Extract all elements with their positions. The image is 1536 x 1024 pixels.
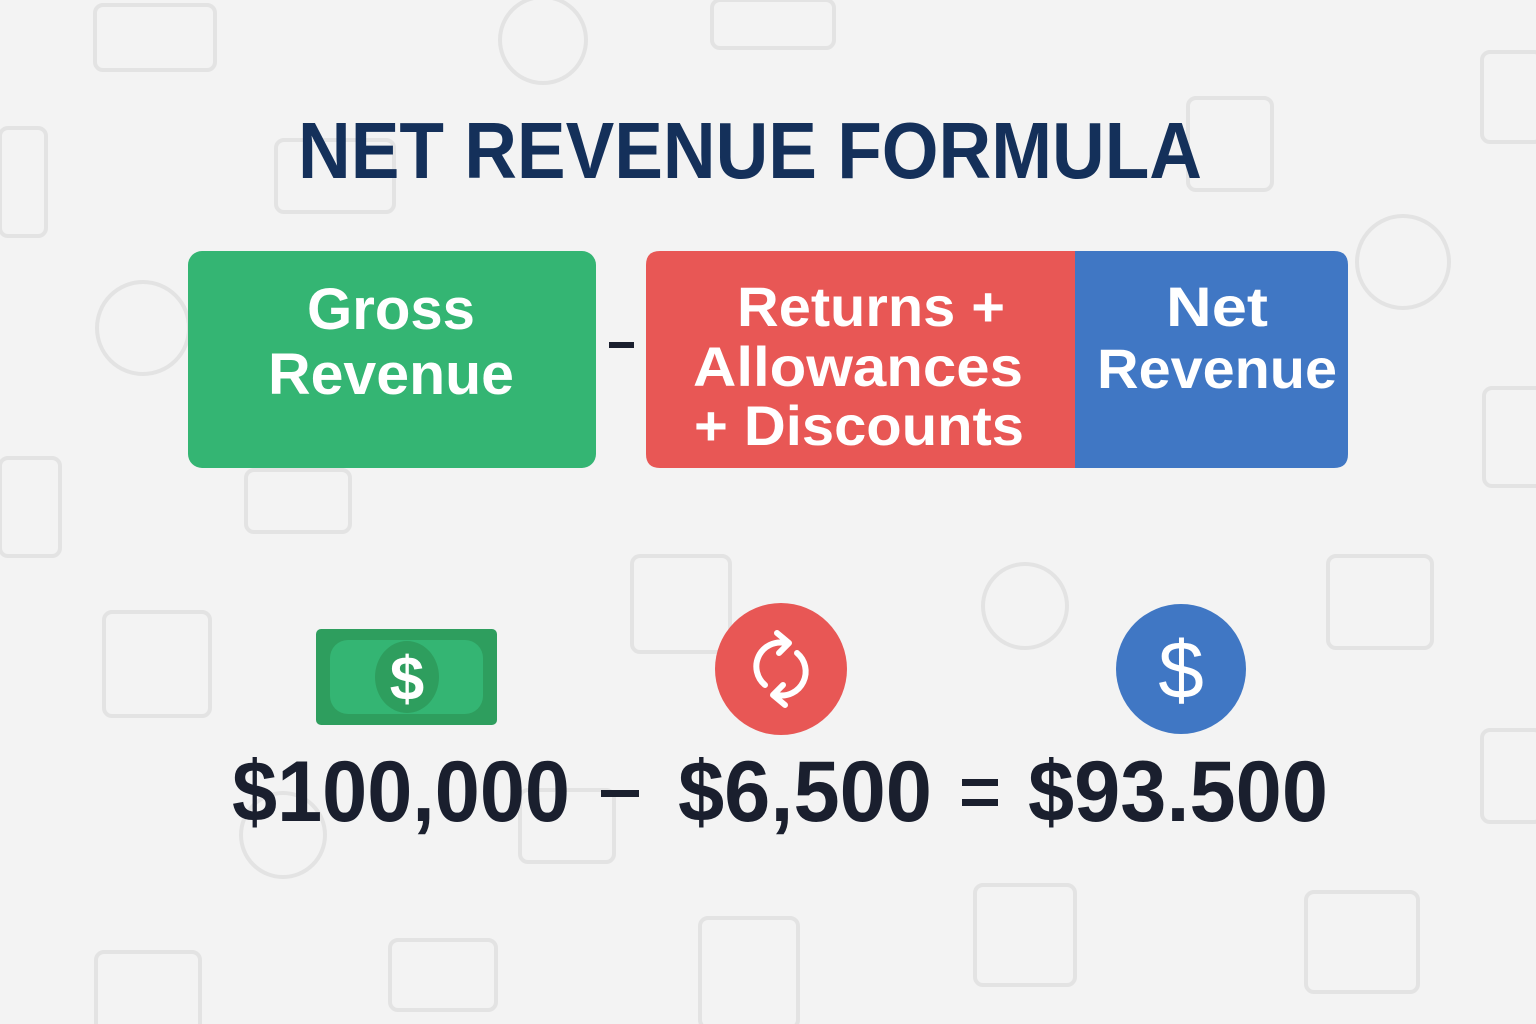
example calculation: $93.500 [1028, 744, 1328, 840]
example calculation: $6,500 [678, 744, 932, 840]
box: net revenue: Net [1166, 275, 1268, 338]
box: deductions: Returns + [737, 275, 1005, 338]
icon: dollar coin: $ [1158, 625, 1204, 716]
icon: dollar coin [1116, 604, 1246, 734]
box: deductions: + Discounts [694, 394, 1024, 457]
icon: banknote [316, 629, 497, 725]
box: net revenue [1075, 251, 1348, 468]
box: net revenue: Revenue [1097, 337, 1337, 400]
box: gross revenue [188, 251, 596, 468]
box: deductions: Allowances [693, 335, 1023, 398]
box: gross revenue: Revenue [268, 342, 514, 407]
example calculation: $100,000 [232, 744, 570, 840]
box: gross revenue: Gross [307, 277, 475, 342]
icon: banknote: $ [390, 645, 424, 714]
icon: returns cycle [715, 603, 847, 735]
minus operator [609, 342, 634, 348]
title: NET REVENUE FORMULA [298, 106, 1202, 195]
example calculation [232, 744, 1328, 840]
box: deductions [646, 251, 1075, 468]
